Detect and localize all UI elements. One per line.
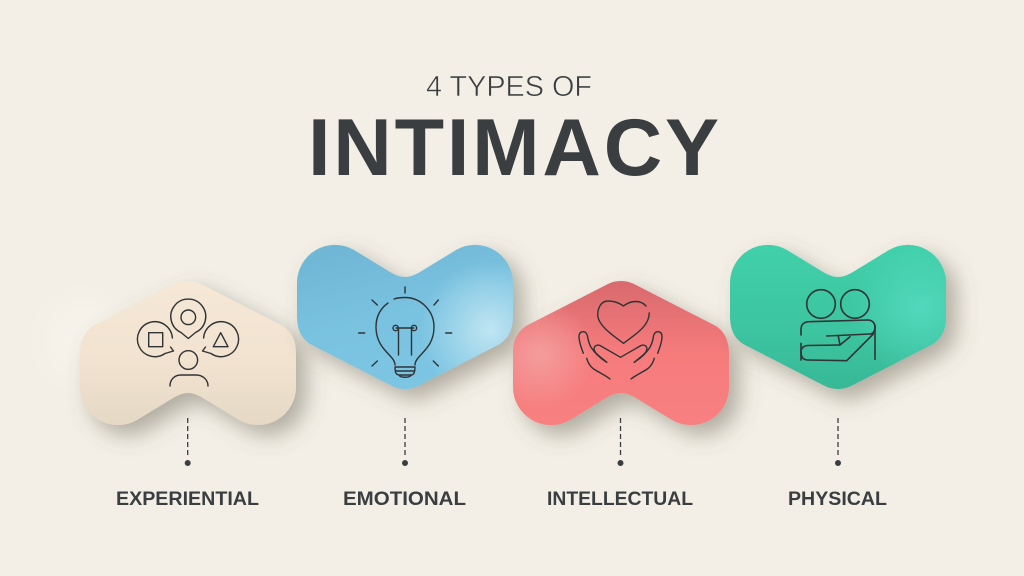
connector: experiential: [185, 418, 191, 466]
icon: hands holding heart: [579, 301, 662, 379]
shape: red chevron: [513, 281, 729, 425]
panel: physical: [730, 245, 946, 389]
icon: two people hugging: [801, 290, 875, 361]
label: physical: PHYSICAL: [788, 489, 887, 510]
icon: light bulb: [359, 287, 452, 377]
connector: emotional: [402, 418, 408, 466]
shape: green heart chevron: [730, 245, 946, 389]
label: experiential: EXPERIENTIAL: [116, 489, 259, 510]
shape: beige chevron: [80, 281, 296, 425]
panel: emotional: [297, 245, 513, 389]
label: emotional: EMOTIONAL: [343, 489, 466, 510]
main heading: INTIMACY: [308, 103, 719, 193]
title: [308, 71, 719, 193]
shape: blue heart chevron: [297, 245, 513, 389]
panel: intellectual: [513, 281, 729, 425]
connector: intellectual: [618, 418, 624, 466]
panel: experiential: [80, 281, 296, 425]
label: intellectual: INTELLECTUAL: [547, 489, 693, 510]
subtitle: 4 TYPES OF: [426, 71, 592, 103]
icon: person with speech bubbles: [137, 299, 239, 386]
connector: physical: [835, 418, 841, 466]
